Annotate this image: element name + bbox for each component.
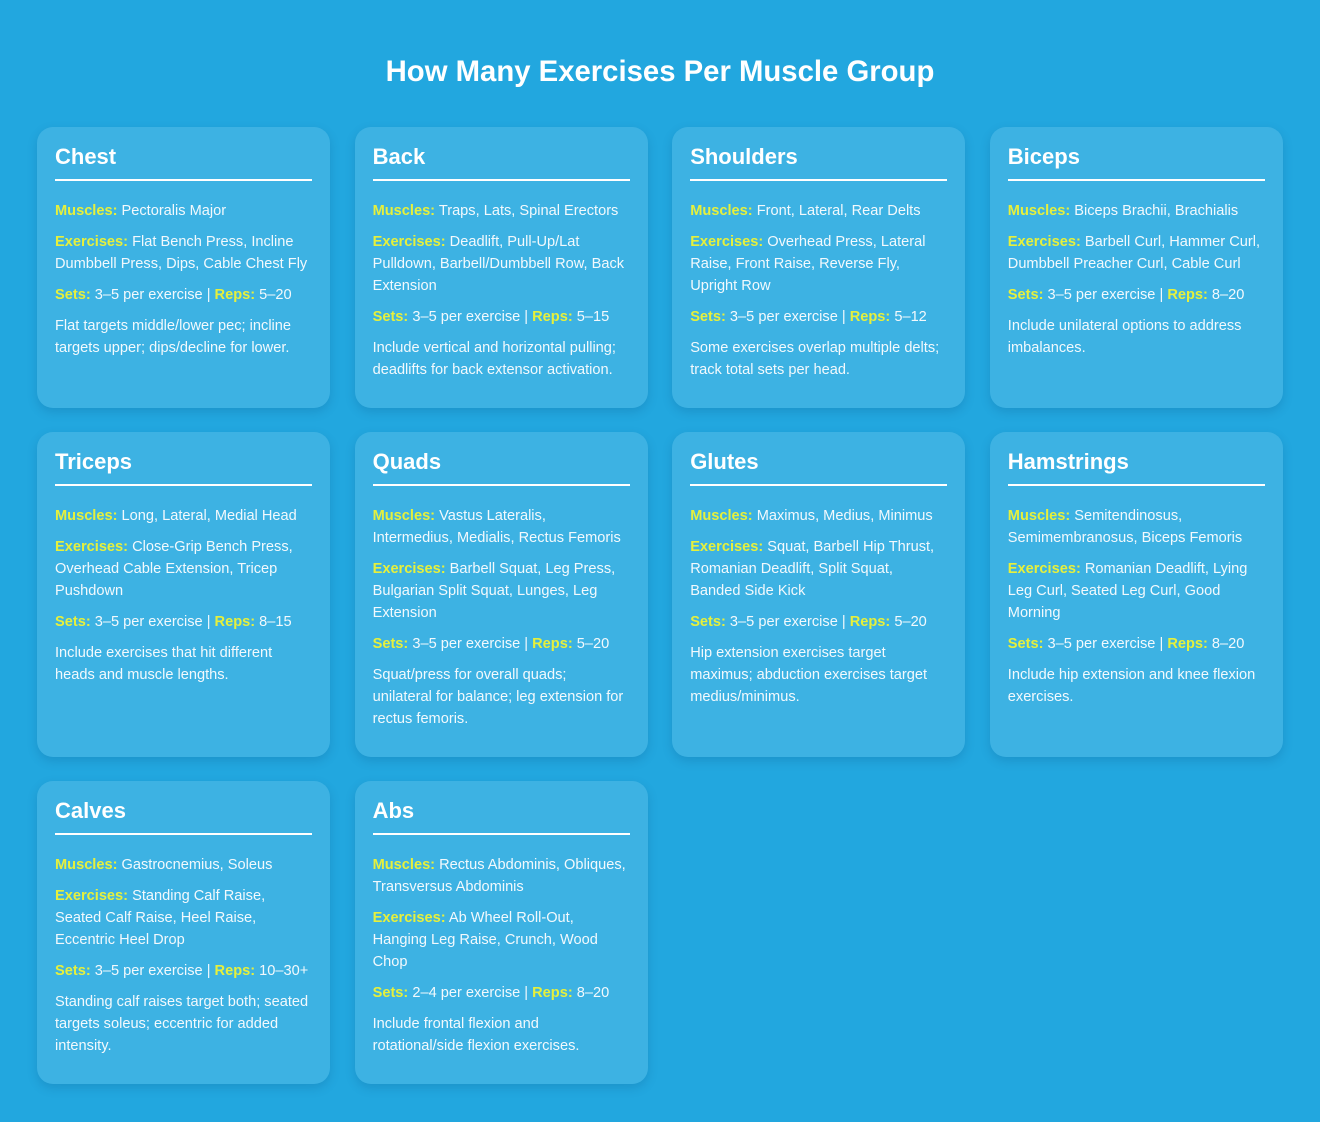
panel: biceps (990, 127, 1283, 408)
panel: back (355, 127, 648, 408)
panel: shoulders: Upright Row (690, 278, 770, 294)
panel: abs (355, 781, 648, 1084)
panel: calves (37, 781, 330, 1084)
panel: shoulders (672, 127, 965, 408)
panel: shoulders: track total sets per head. (690, 362, 850, 378)
panel: chest: Chest (55, 144, 116, 169)
title: How Many Exercises Per Muscle Group (386, 55, 934, 88)
panel: biceps: imbalances. (1008, 340, 1086, 356)
panel: back: Muscles: Traps, Lats, Spinal Erectors (373, 203, 618, 219)
panel: calves: Seated Calf Raise, Heel Raise, (55, 910, 256, 926)
panel: shoulders: Sets: 3–5 per exercise | Reps: 5–12 (690, 309, 927, 325)
panel: calves: Standing calf raises target both; seated (55, 994, 308, 1010)
panel: calves: Sets: 3–5 per exercise | Reps: 10–30+ (55, 963, 308, 979)
panel: glutes: Romanian Deadlift, Split Squat, (690, 561, 893, 577)
panel: triceps: heads and muscle lengths. (55, 667, 229, 683)
panel: glutes: Sets: 3–5 per exercise | Reps: 5–20 (690, 614, 927, 630)
panel: glutes: Glutes (690, 449, 759, 474)
panel: quads: Squat/press for overall quads; (373, 667, 566, 683)
panel: glutes: Exercises: Squat, Barbell Hip Thrust, (690, 539, 934, 555)
panel: calves: Calves (55, 798, 126, 823)
panel: quads: Muscles: Vastus Lateralis, (373, 508, 546, 524)
panel: back: Exercises: Deadlift, Pull-Up/Lat (373, 234, 579, 250)
panel: chest: Dumbbell Press, Dips, Cable Chest Fly (55, 256, 307, 272)
panel: shoulders: Shoulders (690, 144, 798, 169)
panel: glutes: Hip extension exercises target (690, 645, 886, 661)
panel: hamstrings: Include hip extension and knee flexion (1008, 667, 1255, 683)
panel: abs: Hanging Leg Raise, Crunch, Wood (373, 932, 598, 948)
panel: abs: Transversus Abdominis (373, 879, 524, 895)
panel: abs: Abs (373, 798, 414, 823)
panel: triceps: Overhead Cable Extension, Tricep (55, 561, 277, 577)
panel: calves: Muscles: Gastrocnemius, Soleus (55, 857, 272, 873)
panel: back: deadlifts for back extensor activation. (373, 362, 613, 378)
panel: back: Extension (373, 278, 437, 294)
panel: glutes (672, 432, 965, 757)
panel: back: Back (373, 144, 425, 169)
panel: triceps: Exercises: Close-Grip Bench Press, (55, 539, 293, 555)
panel: chest: Sets: 3–5 per exercise | Reps: 5–20 (55, 287, 292, 303)
panel: triceps: Muscles: Long, Lateral, Medial Head (55, 508, 297, 524)
panel: abs: Muscles: Rectus Abdominis, Obliques, (373, 857, 626, 873)
panel: glutes: Muscles: Maximus, Medius, Minimus (690, 508, 933, 524)
panel: biceps: Sets: 3–5 per exercise | Reps: 8–20 (1008, 287, 1244, 303)
panel: biceps: Dumbbell Preacher Curl, Cable Curl (1008, 256, 1241, 272)
panel: chest: Muscles: Pectoralis Major (55, 203, 226, 219)
panel: triceps (37, 432, 330, 757)
panel: hamstrings (990, 432, 1283, 757)
panel: calves: intensity. (55, 1038, 112, 1054)
panel: calves: targets soleus; eccentric for added (55, 1016, 278, 1032)
panel: shoulders: Raise, Front Raise, Reverse Fly, (690, 256, 900, 272)
panel: shoulders: Exercises: Overhead Press, Lateral (690, 234, 925, 250)
panel: quads: Sets: 3–5 per exercise | Reps: 5–20 (373, 636, 609, 652)
panel: back: Pulldown, Barbell/Dumbbell Row, Back (373, 256, 624, 272)
panel: abs: Chop (373, 954, 407, 970)
panel: quads: Extension (373, 605, 437, 621)
panel: quads (355, 432, 648, 757)
panel: quads: Exercises: Barbell Squat, Leg Press, (373, 561, 615, 577)
panel: calves: Eccentric Heel Drop (55, 932, 185, 948)
panel: hamstrings: Morning (1008, 605, 1061, 621)
panel: triceps: Triceps (55, 449, 132, 474)
panel: triceps: Pushdown (55, 583, 123, 599)
panel: hamstrings: Muscles: Semitendinosus, (1008, 508, 1182, 524)
panel: glutes: maximus; abduction exercises target (690, 667, 927, 683)
panel: hamstrings: Hamstrings (1008, 449, 1129, 474)
panel: back: Sets: 3–5 per exercise | Reps: 5–15 (373, 309, 609, 325)
panel: chest: targets upper; dips/decline for lower. (55, 340, 289, 356)
panel: chest: Exercises: Flat Bench Press, Incline (55, 234, 294, 250)
panel: glutes: medius/minimus. (690, 689, 800, 705)
panel: quads: Intermedius, Medialis, Rectus Femoris (373, 530, 621, 546)
panel: chest: Flat targets middle/lower pec; incline (55, 318, 291, 334)
panel: biceps: Exercises: Barbell Curl, Hammer Curl, (1008, 234, 1260, 250)
panel: glutes: Banded Side Kick (690, 583, 805, 599)
panel: chest (37, 127, 330, 408)
panel: triceps: Include exercises that hit different (55, 645, 272, 661)
panel: quads: Bulgarian Split Squat, Lunges, Leg (373, 583, 597, 599)
panel: biceps: Biceps (1008, 144, 1080, 169)
panel: calves: Exercises: Standing Calf Raise, (55, 888, 265, 904)
panel: abs: Sets: 2–4 per exercise | Reps: 8–20 (373, 985, 609, 1001)
panel: hamstrings: exercises. (1008, 689, 1073, 705)
panel: abs: Include frontal flexion and (373, 1016, 539, 1032)
panel: back: Include vertical and horizontal pulling; (373, 340, 616, 356)
panel: triceps: Sets: 3–5 per exercise | Reps: 8–15 (55, 614, 292, 630)
panel: hamstrings: Exercises: Romanian Deadlift, Lying (1008, 561, 1247, 577)
panel: quads: rectus femoris. (373, 711, 468, 727)
panel: quads: Quads (373, 449, 441, 474)
panel: biceps: Muscles: Biceps Brachii, Brachialis (1008, 203, 1238, 219)
panel: shoulders: Muscles: Front, Lateral, Rear Delts (690, 203, 921, 219)
panel: abs: rotational/side flexion exercises. (373, 1038, 579, 1054)
panel: hamstrings: Sets: 3–5 per exercise | Reps: 8–20 (1008, 636, 1244, 652)
panel: shoulders: Some exercises overlap multiple delts; (690, 340, 939, 356)
panel: hamstrings: Semimembranosus, Biceps Femoris (1008, 530, 1242, 546)
panel: abs: Exercises: Ab Wheel Roll-Out, (373, 910, 574, 926)
panel: quads: unilateral for balance; leg extension for (373, 689, 623, 705)
panel: hamstrings: Leg Curl, Seated Leg Curl, Good (1008, 583, 1220, 599)
panel: biceps: Include unilateral options to address (1008, 318, 1241, 334)
